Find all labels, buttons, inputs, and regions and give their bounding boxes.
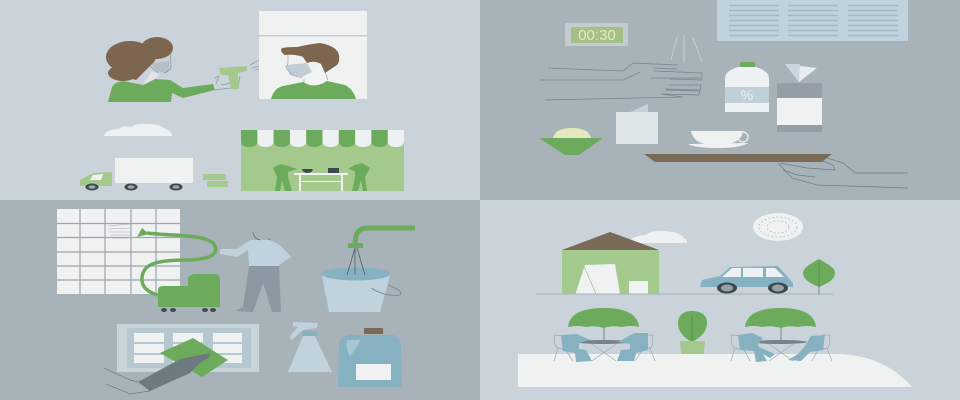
icon: cup and saucer <box>688 131 748 148</box>
icon: gloved hand with cloth <box>104 338 228 394</box>
icon: roadside tree <box>803 259 835 294</box>
icon: spray bottle <box>288 322 332 372</box>
panel: deep cleaning <box>0 200 480 400</box>
icon: cleaner person <box>220 232 291 312</box>
panel: outdoor dining <box>480 200 960 400</box>
icon: digital timer: 00:30 <box>578 27 616 44</box>
icon: tissue box <box>777 64 822 132</box>
icon: woman with thermometer <box>106 37 273 102</box>
icon: cloud behind house <box>628 231 687 243</box>
icon: car <box>700 266 793 294</box>
icon: tap filling bucket <box>322 228 415 312</box>
icon: air vent being wiped <box>117 324 259 372</box>
panel: hygiene in the dining area <box>480 0 960 200</box>
icon: market stall <box>241 130 404 191</box>
icon: green floor cleaner with hose <box>137 228 220 312</box>
icon: sanitised hands <box>540 35 702 100</box>
icon: hand holding tray <box>778 158 908 188</box>
icon: right table with umbrella <box>731 308 832 362</box>
icon: delivery truck <box>80 158 193 190</box>
icon: cloud <box>104 124 172 136</box>
icon: menu card <box>616 104 658 144</box>
icon: sun <box>753 213 803 241</box>
icon: sanitiser bottle <box>725 62 769 112</box>
icon: house with tent <box>562 232 659 294</box>
pavement <box>518 354 912 387</box>
panel: temperature check and delivery <box>0 0 480 200</box>
icon: digital timer <box>565 23 628 46</box>
icon: potted plant <box>678 311 707 354</box>
icon: detergent jug <box>338 328 402 387</box>
icon: sanitiser bottle: % <box>741 87 753 103</box>
icon: boxes <box>203 174 228 187</box>
ground line <box>536 294 833 295</box>
icon: man in window <box>259 11 367 99</box>
icon: serving tray <box>644 154 832 162</box>
icon: left table with umbrella <box>554 308 655 362</box>
icon: tiled wall <box>57 209 180 294</box>
icon: bowl of food <box>539 128 603 155</box>
icon: wall vent <box>717 0 908 41</box>
